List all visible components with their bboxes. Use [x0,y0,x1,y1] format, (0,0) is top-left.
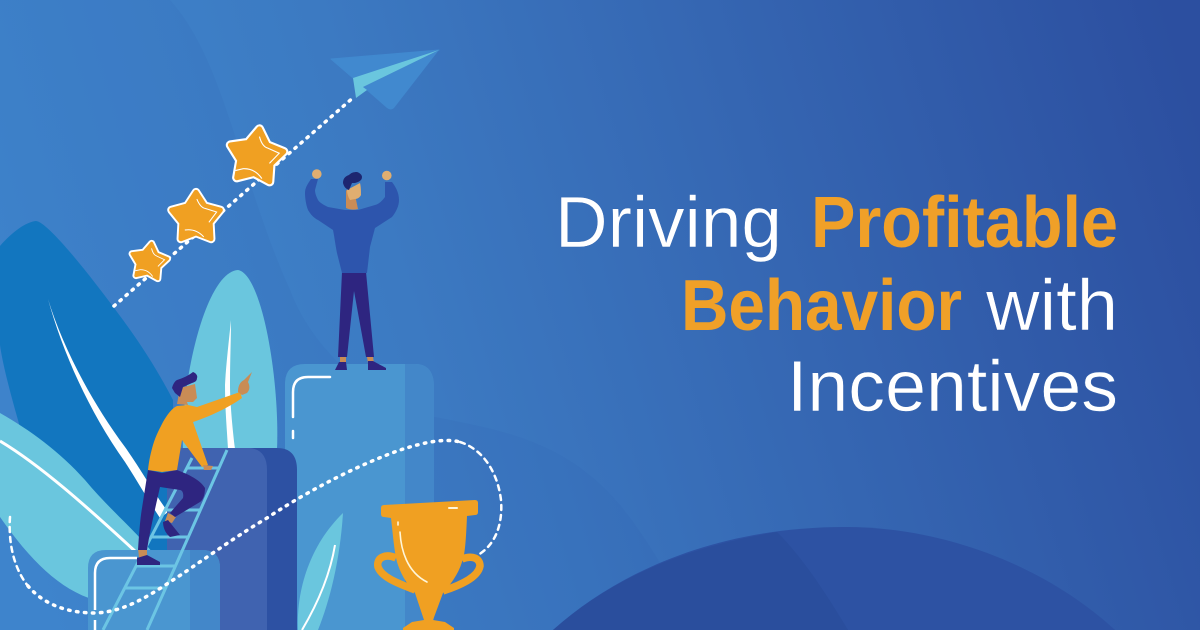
standing person [305,169,399,370]
small block [88,550,220,630]
leaf: cyan centre [183,270,277,450]
title: Profitable [811,183,1118,263]
ladder [103,450,227,630]
front ankle [138,548,147,558]
ankles [340,357,374,363]
pants [338,272,374,357]
head [177,384,197,405]
title: with [985,266,1118,346]
leaf: small cyan [298,513,343,630]
shoe [137,555,160,565]
title: Driving [555,183,782,263]
star: small [129,241,169,280]
tall block [285,364,434,630]
title: Incentives [787,347,1118,427]
rear ankle [165,513,176,523]
leaf vein: centre [225,320,235,449]
background wave shape [0,0,695,630]
title: Behavior [681,266,962,346]
illustration [0,50,501,630]
shoes [335,361,386,370]
leaf vein: dark leaf [48,299,168,518]
lower hand [203,465,213,470]
neck [346,190,358,210]
paper plane [331,50,439,110]
torso and pointing arm [148,392,242,472]
hair [343,172,362,190]
star: large [227,126,286,183]
pants [138,470,205,550]
title [555,183,1118,427]
face [347,183,361,200]
trophy [378,500,480,630]
hair [172,372,197,397]
leaf vein: small [302,545,335,630]
shirt [305,179,399,273]
fists [312,169,392,180]
leaf: cyan lower left [0,413,152,600]
leaf: dark blue [0,221,175,552]
rear shoe [163,520,180,537]
climbing person [137,372,252,565]
middle block [167,448,297,630]
bottom hump shape [553,527,1115,630]
leaf vein: lower left [0,441,136,552]
dotted flight line [114,96,355,306]
dashed swoosh line [10,440,501,613]
pointing hand [238,372,252,395]
star: medium [171,192,221,239]
